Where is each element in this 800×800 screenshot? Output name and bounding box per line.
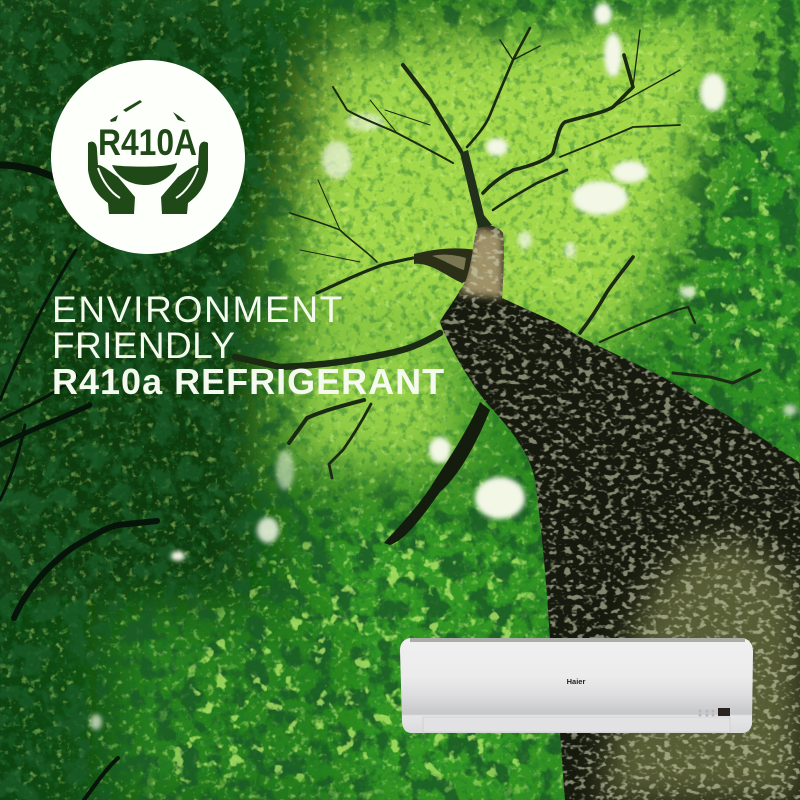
large lower branch [384,402,490,545]
air conditioner unit [400,638,753,733]
heading line 2: FRIENDLY [52,325,235,366]
icon: right hand [161,142,208,214]
heading [52,289,445,402]
brand logo: Haier [567,677,585,686]
heading line 3: R410a REFRIGERANT [52,361,445,402]
R410A badge [51,60,245,254]
heading line 1: ENVIRONMENT [52,289,344,330]
bright leaf clusters [138,109,800,800]
side limb near neck [414,248,476,283]
moss patch [600,540,800,800]
badge label: R410A [98,122,197,163]
tan neck [460,227,503,298]
icon: globe arcs [110,100,186,185]
limb highlight [432,255,466,270]
control panel [698,708,730,716]
tree trunk [440,150,800,800]
upper stem [460,150,492,228]
icon: left hand [88,142,135,214]
